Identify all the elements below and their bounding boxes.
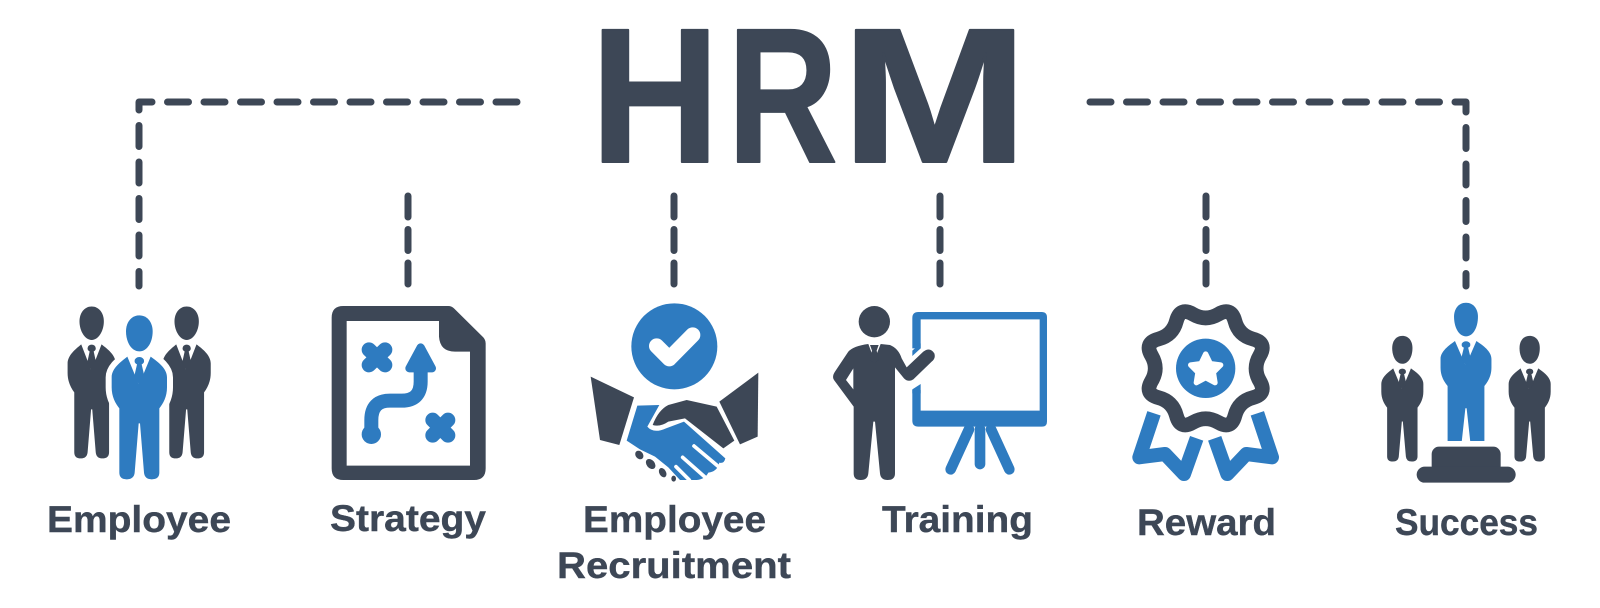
connector: Strategy <box>404 196 412 284</box>
label: Employee Recruitment <box>557 499 791 586</box>
icon: employee group <box>68 307 211 479</box>
label: Strategy: Strategy <box>330 498 486 539</box>
title <box>591 0 1028 203</box>
label: Training: Training <box>882 499 1033 540</box>
icon: recruitment handshake <box>591 303 758 482</box>
icon: trainer at board <box>833 306 1047 480</box>
connector: Reward <box>1202 196 1210 284</box>
icon: reward badge <box>1139 312 1272 474</box>
label: Employee Recruitment: Employee <box>583 499 766 540</box>
label: Reward: Reward <box>1137 502 1276 543</box>
label: Employee Recruitment: Recruitment <box>557 545 791 586</box>
label: Employee: Employee <box>47 499 231 540</box>
connector: Training <box>936 196 944 284</box>
connector: Employee Recruitment <box>670 196 678 284</box>
label: Success: Success <box>1395 502 1538 543</box>
connector: left bracket to Employee <box>139 102 517 286</box>
icon: strategy document <box>332 306 486 480</box>
icon: success podium <box>1381 303 1551 483</box>
connector: right bracket to Success <box>1090 102 1466 286</box>
